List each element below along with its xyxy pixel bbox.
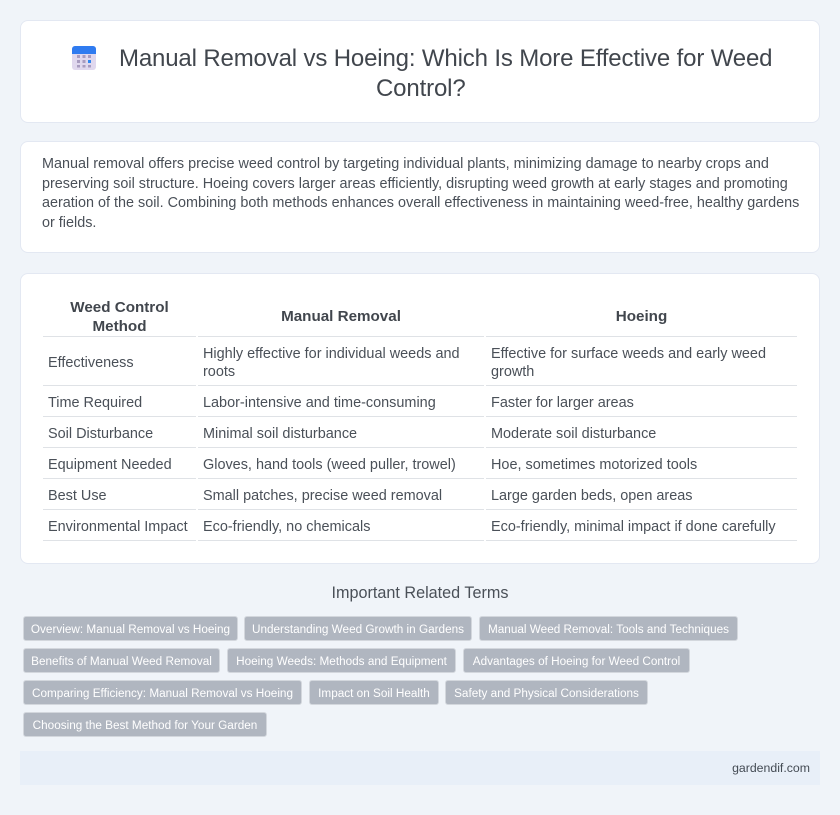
chip: Benefits of Manual Weed Removal (31, 655, 212, 668)
chip: Overview: Manual Removal vs Hoeing (31, 623, 230, 636)
chip (463, 648, 690, 673)
chip: Advantages of Hoeing for Weed Control (473, 655, 680, 668)
table header row: Hoeing (616, 308, 667, 325)
chip (244, 616, 472, 641)
panel: header (20, 20, 820, 123)
row: effectiveness (48, 346, 766, 380)
table header row: Weed Control (70, 299, 169, 316)
row: time required (48, 395, 634, 411)
row: environmental impact: Environmental Impact (48, 519, 188, 535)
chip: Manual Weed Removal: Tools and Techniques (488, 623, 729, 636)
chip (23, 680, 302, 705)
title (119, 45, 772, 102)
title: Manual Removal vs Hoeing: Which Is More Effective for Weed (119, 45, 772, 72)
row: soil disturbance (48, 426, 656, 442)
heading: important related terms: Important Related Terms (332, 584, 508, 602)
row: time required: Labor-intensive and time-consuming (203, 395, 436, 411)
intro paragraph: preserving soil structure. Hoeing covers larger areas efficiently, disrupting weed growth at early stages and promoting (42, 176, 788, 192)
chip: Comparing Efficiency: Manual Removal vs Hoeing (32, 687, 293, 700)
row: equipment needed: Equipment Needed (48, 457, 172, 473)
panel: introduction text (20, 141, 820, 253)
panel: comparison table (20, 273, 820, 564)
row: time required: Time Required (48, 395, 142, 411)
icon: calendar (72, 46, 96, 70)
footer source text: gardendif.com (732, 761, 810, 775)
intro paragraph (42, 156, 799, 230)
intro paragraph: aeration of the soil. Combining both methods enhances overall effectiveness in maintaining weed-free, healthy gardens (42, 195, 799, 211)
row: environmental impact: Eco-friendly, no chemicals (203, 519, 370, 535)
chip: Choosing the Best Method for Your Garden (33, 719, 257, 732)
table header row (70, 299, 667, 335)
row: best use: Large garden beds, open areas (491, 488, 692, 504)
title: Control? (376, 74, 466, 102)
row: best use: Best Use (48, 488, 107, 504)
row: equipment needed: Hoe, sometimes motorized tools (491, 457, 697, 473)
row: soil disturbance: Moderate soil disturbance (491, 426, 656, 442)
chip (479, 616, 738, 641)
row: equipment needed: Gloves, hand tools (weed puller, trowel) (203, 457, 456, 473)
row: effectiveness: growth (491, 364, 534, 380)
related terms chips (23, 616, 738, 737)
chip (445, 680, 648, 705)
chip: Impact on Soil Health (318, 687, 430, 700)
row: soil disturbance: Soil Disturbance (48, 426, 153, 442)
row: equipment needed (48, 457, 697, 473)
row: effectiveness: Highly effective for individual weeds and (203, 346, 460, 362)
chip (23, 648, 220, 673)
row: best use (48, 488, 692, 504)
chip (309, 680, 439, 705)
row: time required: Faster for larger areas (491, 395, 634, 411)
chip (23, 616, 238, 641)
intro paragraph: or fields. (42, 214, 96, 230)
chip (227, 648, 456, 673)
row: environmental impact: Eco-friendly, minimal impact if done carefully (491, 519, 776, 535)
table header row: Manual Removal (281, 308, 401, 325)
chip: Hoeing Weeds: Methods and Equipment (236, 655, 447, 668)
footer bar (20, 751, 820, 785)
chip: Safety and Physical Considerations (454, 687, 639, 700)
row: effectiveness: Effective for surface weeds and early weed (491, 346, 766, 362)
chip: Understanding Weed Growth in Gardens (252, 623, 464, 636)
row: effectiveness: Effectiveness (48, 355, 134, 371)
chip (23, 712, 267, 737)
row: effectiveness: roots (203, 364, 235, 380)
table header row: Method (92, 318, 146, 335)
row: best use: Small patches, precise weed removal (203, 488, 442, 504)
row: soil disturbance: Minimal soil disturbance (203, 426, 357, 442)
intro paragraph: Manual removal offers precise weed control by targeting individual plants, minimizing damage to nearby crops and (42, 156, 769, 172)
row: environmental impact (48, 519, 776, 535)
